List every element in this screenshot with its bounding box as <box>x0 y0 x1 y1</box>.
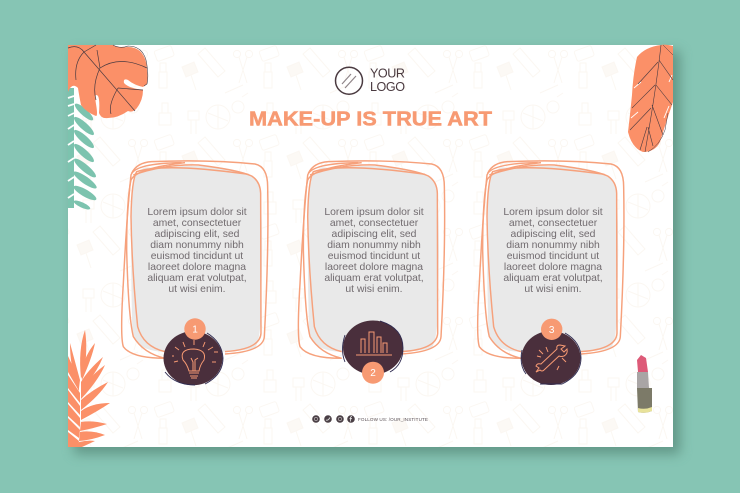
badge 3: 3 <box>549 325 555 336</box>
text block 2: adipiscing elit, sed <box>332 228 416 240</box>
text block 2: amet, consectetuer <box>330 218 418 228</box>
panel 1 <box>122 161 268 358</box>
leaf: orange feather <box>628 45 673 152</box>
text block 2: aliquam erat volutpat, <box>324 272 424 284</box>
leaf: orange palm <box>68 330 110 447</box>
text block 1: aliquam erat volutpat, <box>147 272 247 284</box>
logo: YOUR <box>370 66 405 80</box>
footer text: FOLLOW US: /OUR_INSTITUTE <box>358 417 428 422</box>
icon: bulb circle <box>164 331 223 385</box>
text block 3: diam nonummy nibh <box>506 240 600 250</box>
panel 2 <box>298 161 445 358</box>
badge 2: 2 <box>370 368 376 379</box>
icon: lipstick <box>637 355 652 413</box>
leaf: monstera <box>68 45 148 118</box>
text block 3: aliquam erat volutpat, <box>503 272 603 284</box>
badge 1: 1 <box>192 324 198 336</box>
badge 1 <box>184 318 206 340</box>
panel 3 <box>478 161 624 358</box>
logo <box>336 66 405 94</box>
text block 3: amet, consectetuer <box>509 218 597 228</box>
text block 2: ut wisi enim. <box>345 284 403 294</box>
card shadow <box>74 51 680 454</box>
text block 2 <box>324 206 424 294</box>
title: MAKE-UP IS TRUE ART <box>249 108 492 130</box>
logo: LOGO <box>370 80 405 94</box>
icon: wrench circle <box>521 331 581 385</box>
text block 1: euismod tincidunt ut <box>151 250 243 262</box>
white card <box>68 45 673 447</box>
text block 3: Lorem ipsum dolor sit <box>503 206 603 218</box>
text block 2: laoreet dolore magna <box>325 262 423 272</box>
badge 3 <box>541 319 562 340</box>
leaf: teal fern <box>68 88 99 211</box>
text block 1: laoreet dolore magna <box>148 262 246 272</box>
text block 3: adipiscing elit, sed <box>511 228 595 240</box>
text block 3 <box>503 206 603 294</box>
social icons <box>312 415 355 423</box>
text block 3: euismod tincidunt ut <box>507 250 599 262</box>
text block 1 <box>147 206 247 294</box>
text block 3: ut wisi enim. <box>524 284 582 294</box>
text block 1: ut wisi enim. <box>168 284 226 294</box>
text block 1: Lorem ipsum dolor sit <box>147 206 247 218</box>
text block 1: adipiscing elit, sed <box>155 228 239 240</box>
text block 3: laoreet dolore magna <box>504 262 602 272</box>
badge 2 <box>362 362 384 384</box>
icon: chart circle <box>342 320 403 374</box>
text block 1: amet, consectetuer <box>153 218 241 228</box>
text block 1: diam nonummy nibh <box>150 240 244 250</box>
text block 2: euismod tincidunt ut <box>328 250 420 262</box>
text block 2: diam nonummy nibh <box>327 240 421 250</box>
text block 2: Lorem ipsum dolor sit <box>324 206 424 218</box>
